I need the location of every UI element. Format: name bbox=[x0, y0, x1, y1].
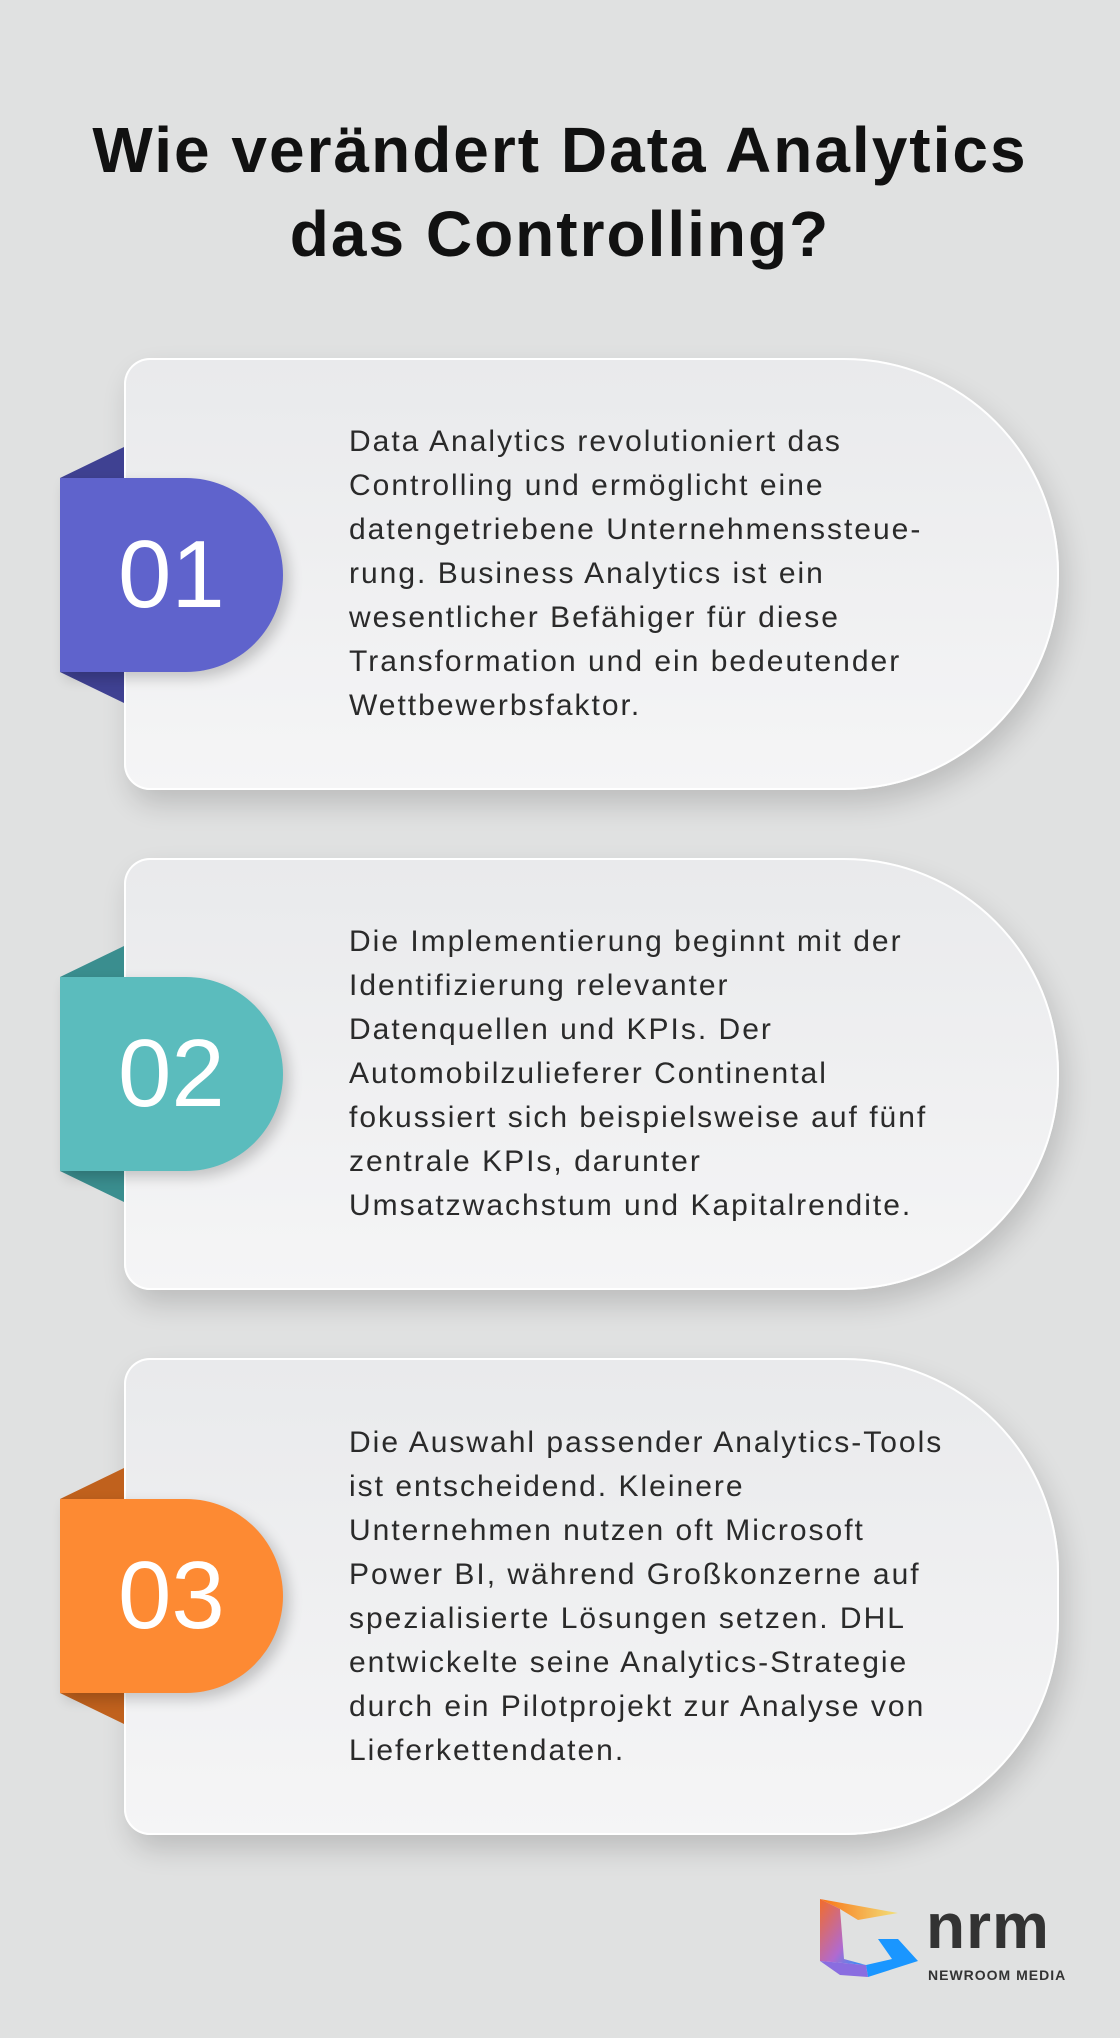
fold: badge 1 bbox=[60, 447, 124, 703]
badge 02 bbox=[60, 977, 283, 1171]
text: card 1: datengetriebene Unternehmenssteue- bbox=[349, 513, 922, 546]
panel: card 2 bbox=[124, 858, 1059, 1290]
text: card 3: durch ein Pilotprojekt zur Analyse von bbox=[349, 1690, 925, 1722]
badge 01: 01 bbox=[118, 521, 225, 628]
text: card 1: Transformation und ein bedeutender bbox=[349, 645, 901, 678]
title: Wie verändert Data Analytics bbox=[92, 114, 1028, 186]
text: card 2: fokussiert sich beispielsweise auf fünf bbox=[349, 1101, 927, 1134]
text: card 2: Umsatzwachstum und Kapitalrendite. bbox=[349, 1189, 912, 1222]
icon: logo mark bbox=[820, 1899, 918, 1977]
badge 02: 02 bbox=[118, 1020, 225, 1127]
text: card 2: Identifizierung relevanter bbox=[349, 969, 730, 1002]
text: card 2: Datenquellen und KPIs. Der bbox=[349, 1013, 773, 1046]
text: card 2: Automobilzulieferer Continental bbox=[349, 1057, 828, 1090]
text: card 1: rung. Business Analytics ist ein bbox=[349, 557, 825, 590]
text: card 2: zentrale KPIs, darunter bbox=[349, 1145, 702, 1178]
fold: badge 2 bbox=[60, 946, 124, 1202]
text: nrm: nrm bbox=[926, 1890, 1050, 1962]
text: card 2 bbox=[349, 925, 927, 1222]
text: card 3: Power BI, während Großkonzerne auf bbox=[349, 1558, 921, 1590]
badge 03: 03 bbox=[118, 1542, 225, 1649]
panel: card 3 bbox=[124, 1358, 1059, 1835]
text: card 3: Lieferkettendaten. bbox=[349, 1734, 625, 1766]
title: das Controlling? bbox=[290, 198, 830, 270]
badge 03 bbox=[60, 1499, 283, 1693]
text: card 2: Die Implementierung beginnt mit der bbox=[349, 925, 903, 958]
text: card 1 bbox=[349, 425, 922, 722]
text: card 1: Data Analytics revolutioniert das bbox=[349, 425, 842, 458]
text: card 3: spezialisierte Lösungen setzen. DHL bbox=[349, 1602, 906, 1634]
text: card 1: Wettbewerbsfaktor. bbox=[349, 689, 641, 722]
text: card 1: wesentlicher Befähiger für diese bbox=[349, 601, 840, 634]
badge 01 bbox=[60, 478, 283, 672]
fold: badge 3 bbox=[60, 1468, 124, 1724]
text: NEWROOM MEDIA: NEWROOM MEDIA bbox=[928, 1967, 1066, 1983]
text: card 3: entwickelte seine Analytics-Strategie bbox=[349, 1646, 908, 1678]
text: card 3: Die Auswahl passender Analytics-Tools bbox=[349, 1426, 943, 1458]
text: card 3: Unternehmen nutzen oft Microsoft bbox=[349, 1514, 865, 1546]
text: card 3: ist entscheidend. Kleinere bbox=[349, 1470, 745, 1502]
text: card 1: Controlling und ermöglicht eine bbox=[349, 469, 825, 502]
panel: card 1 bbox=[124, 358, 1059, 790]
text: card 3 bbox=[349, 1426, 943, 1766]
logo bbox=[820, 1890, 1066, 1983]
title bbox=[92, 114, 1028, 270]
